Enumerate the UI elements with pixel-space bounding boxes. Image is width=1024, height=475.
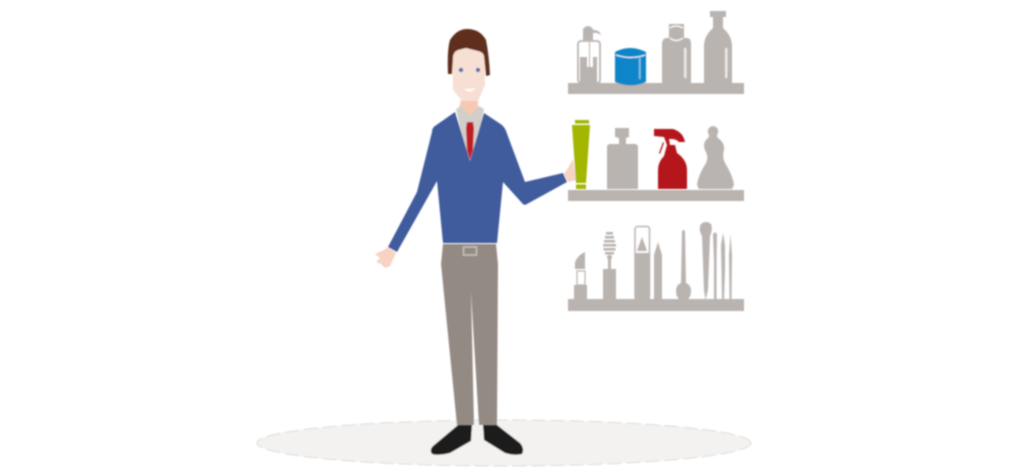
red spray bottle	[654, 129, 687, 189]
shelf board	[568, 299, 744, 311]
trousers	[441, 244, 498, 425]
blue jar	[615, 48, 646, 86]
man figure	[375, 29, 576, 455]
pencil	[654, 242, 662, 299]
shelf board	[568, 190, 744, 201]
green tube	[572, 120, 590, 189]
floor ellipse	[257, 420, 751, 466]
shelf 1 with bottles	[568, 11, 744, 94]
shelf board	[568, 83, 744, 94]
brushes	[700, 222, 732, 300]
tall bottle	[704, 11, 732, 83]
square flask	[607, 128, 638, 189]
sweater	[388, 112, 567, 252]
hair	[448, 29, 490, 76]
belt buckle	[464, 247, 476, 255]
head	[452, 48, 485, 101]
neck	[459, 96, 478, 122]
pencil case	[634, 226, 650, 299]
round flask	[697, 126, 734, 189]
eyes	[459, 68, 480, 72]
shoes	[431, 425, 523, 455]
pump bottle	[578, 26, 601, 83]
shirt collar	[456, 106, 484, 160]
square bottle	[662, 24, 691, 83]
shelf 2 with bottles	[568, 120, 744, 201]
left hand	[375, 247, 396, 268]
mascara	[603, 232, 616, 299]
tie	[466, 122, 474, 160]
shelf 3 with makeup	[568, 222, 744, 311]
lipstick	[574, 252, 587, 299]
right hand	[564, 159, 576, 182]
nail polish	[676, 230, 691, 300]
smile	[464, 88, 476, 92]
